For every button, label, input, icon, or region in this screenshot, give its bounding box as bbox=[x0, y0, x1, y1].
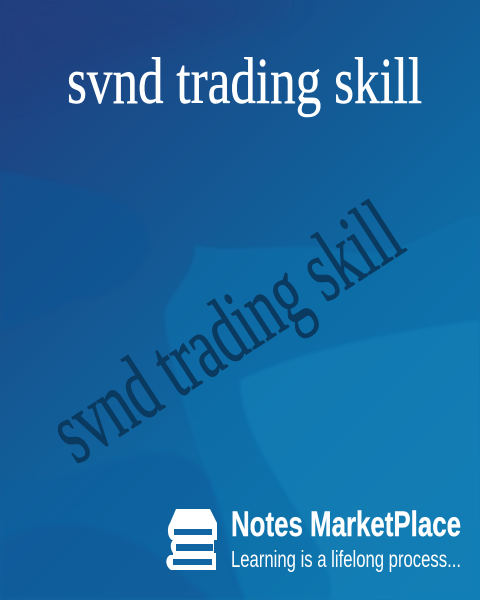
logo: Notes MarketPlace bbox=[166, 505, 461, 572]
title: svnd trading skill bbox=[67, 44, 422, 117]
diagonal watermark: svnd trading skill bbox=[32, 181, 419, 482]
icon: stack of books bbox=[166, 509, 217, 570]
